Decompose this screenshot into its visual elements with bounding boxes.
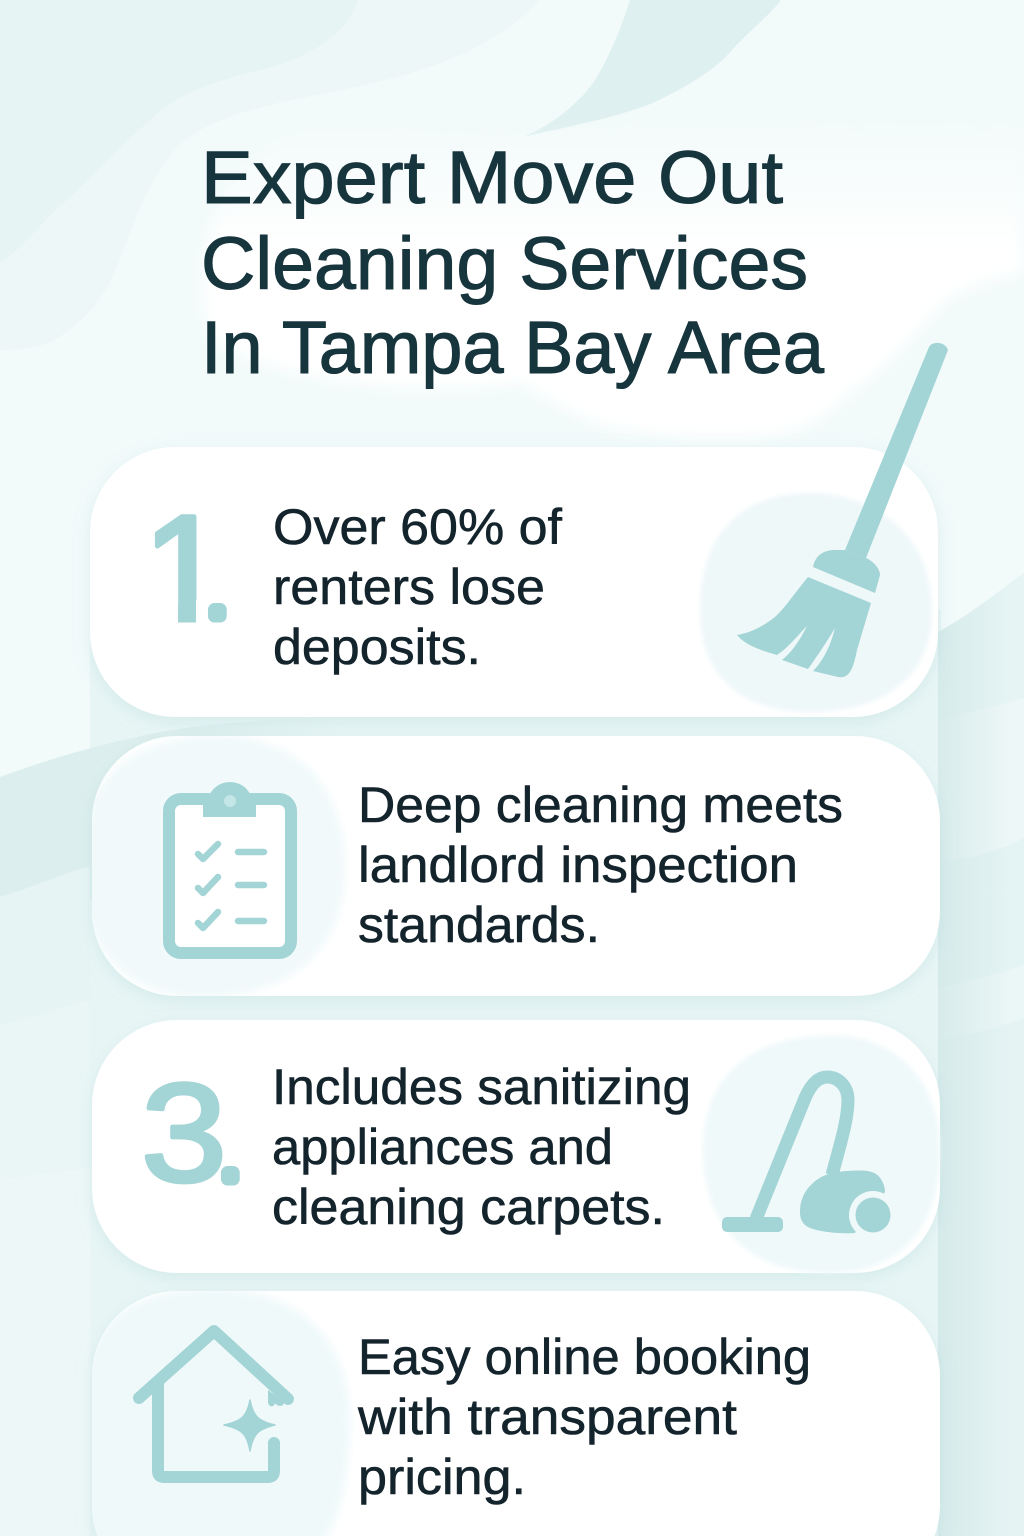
text: card 3 bbox=[272, 1059, 691, 1235]
text: card 2: landlord inspection bbox=[358, 837, 798, 893]
panel: card 4 bbox=[80, 1288, 940, 1536]
icon: broom bbox=[737, 343, 948, 677]
text: card 2: standards. bbox=[358, 897, 600, 953]
title: In Tampa Bay Area bbox=[201, 306, 825, 389]
text: card 1 bbox=[273, 499, 562, 675]
text: card 3: Includes sanitizing bbox=[272, 1059, 691, 1115]
icon backdrop: card 2 bbox=[80, 736, 345, 998]
text: card 3: appliances and bbox=[272, 1119, 613, 1175]
panel: card 3 bbox=[92, 1020, 940, 1273]
title bbox=[201, 136, 825, 389]
text: card 4: with transparent bbox=[357, 1389, 737, 1445]
icon: vacuum bbox=[722, 1077, 897, 1239]
panel: card 1 bbox=[90, 447, 938, 717]
number 3: 3 bbox=[141, 1054, 227, 1211]
icon: house with sparkle bbox=[139, 1331, 288, 1477]
icon backdrop: card 3 bbox=[703, 1035, 940, 1273]
number 1: 1 bbox=[143, 484, 226, 652]
number 1 bbox=[154, 514, 227, 622]
title: Expert Move Out bbox=[201, 136, 783, 219]
text: card 1: deposits. bbox=[273, 619, 481, 675]
icon backdrop: card 4 bbox=[80, 1288, 350, 1536]
text: card 4 bbox=[357, 1329, 811, 1505]
text: card 3: cleaning carpets. bbox=[272, 1179, 665, 1235]
text: card 2: Deep cleaning meets bbox=[358, 777, 843, 833]
text: card 1: Over 60% of bbox=[273, 499, 562, 555]
text: card 4: pricing. bbox=[358, 1449, 526, 1505]
text: card 2 bbox=[358, 777, 843, 953]
text: card 1: renters lose bbox=[273, 559, 545, 615]
icon: clipboard bbox=[169, 782, 291, 953]
title: Cleaning Services bbox=[201, 222, 808, 305]
number 3: . bbox=[222, 1125, 239, 1192]
panel: card 2 bbox=[80, 736, 940, 998]
number 1: . bbox=[209, 562, 226, 629]
text: card 4: Easy online booking bbox=[358, 1329, 811, 1385]
icon backdrop: card 1 bbox=[700, 493, 932, 712]
